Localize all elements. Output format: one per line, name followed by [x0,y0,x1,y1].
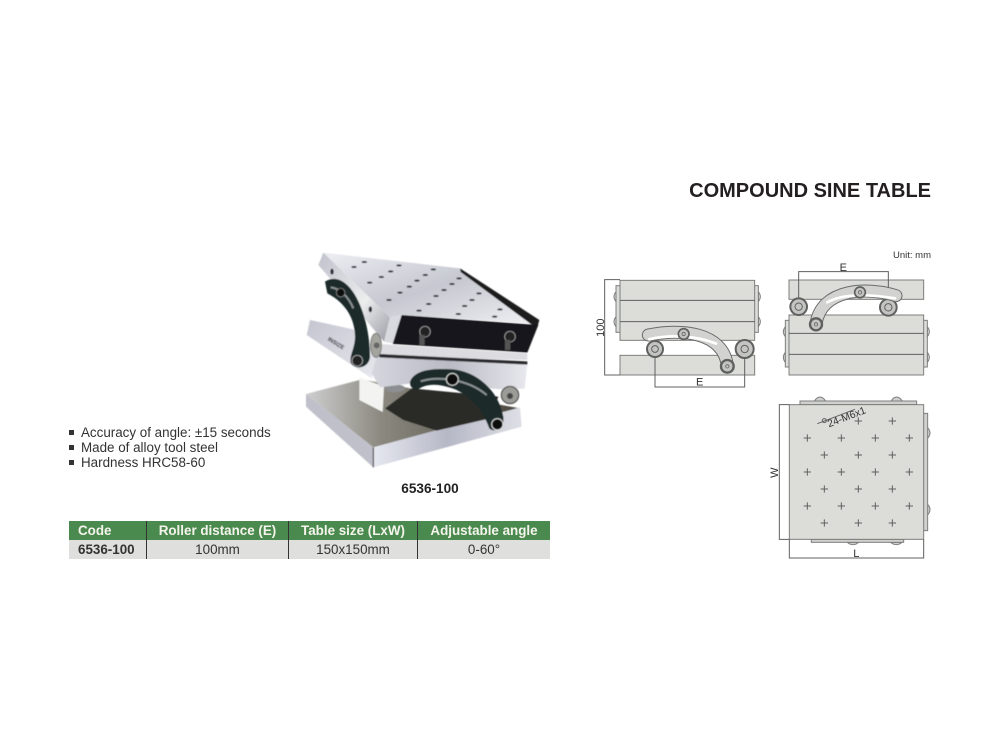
table surface [789,405,924,539]
lower body [789,315,924,375]
data cell: roller distance: 100mm [195,542,240,557]
middle plate: INSIZE [326,337,345,351]
base plate [306,379,522,467]
product photo: compound sine table [306,252,540,468]
header cell: roller distance: Roller distance (E) [159,523,276,538]
data cell: code [69,540,146,559]
arc bracket [816,291,896,324]
specification table [69,521,550,559]
rear roller [385,384,405,392]
data cell: adjustable angle [417,540,550,559]
arc bracket [648,332,727,366]
side knobs [614,286,760,332]
header cell: adjustable angle: Adjustable angle [430,523,538,538]
E dimension [799,272,888,307]
technical drawing: side view left [595,279,761,388]
mounting holes [330,261,503,318]
header cell: adjustable angle [417,521,550,540]
technical drawing: top view [769,396,930,560]
product code caption: 6536-100 [401,481,459,496]
upper body [620,280,755,340]
technical drawing: top view: W [769,467,781,478]
header cell: roller distance [146,521,288,540]
lower arc bracket [410,369,519,430]
base plate [620,355,755,375]
rollers [790,298,897,316]
dimension labels: E [696,376,703,388]
E dimension [655,349,745,387]
middle plate [307,320,527,389]
front screws [419,326,515,350]
dimension lines [779,405,789,539]
feature list: Hardness HRC58-60 [81,455,205,470]
title: COMPOUND SINE TABLE [689,180,931,202]
data cell: roller distance [146,540,288,559]
dimension label: E [840,262,847,274]
top plate [318,253,539,353]
technical drawing: side view right [782,262,930,376]
feature list [69,425,271,470]
header cell: code [69,521,146,540]
rollers [647,340,754,358]
height dimension [605,280,620,375]
data cell: table size: 150x150mm [316,542,390,557]
left arc bracket [325,279,381,367]
header cell: table size: Table size (LxW) [301,523,405,538]
edge knobs [800,397,930,545]
feature list: Made of alloy tool steel [81,440,218,455]
unit label: Unit: mm [893,250,931,261]
dimension labels and hole note: 24-M6x1 [826,405,868,430]
hole crosses [804,417,913,527]
hole callout leader [817,409,855,424]
top plate [789,280,924,299]
header cell: table size [288,521,417,540]
technical drawing: side view left: 100 [595,318,607,337]
support block [359,377,384,412]
data cell: table size [288,540,417,559]
data cell: adjustable angle: 0-60° [468,542,500,557]
technical drawing: top view: L [853,548,859,560]
feature list: Accuracy of angle: ±15 seconds [81,425,271,440]
side knobs [783,320,929,367]
data cell: code: 6536-100 [78,542,135,557]
header cell: code: Code [78,523,111,538]
